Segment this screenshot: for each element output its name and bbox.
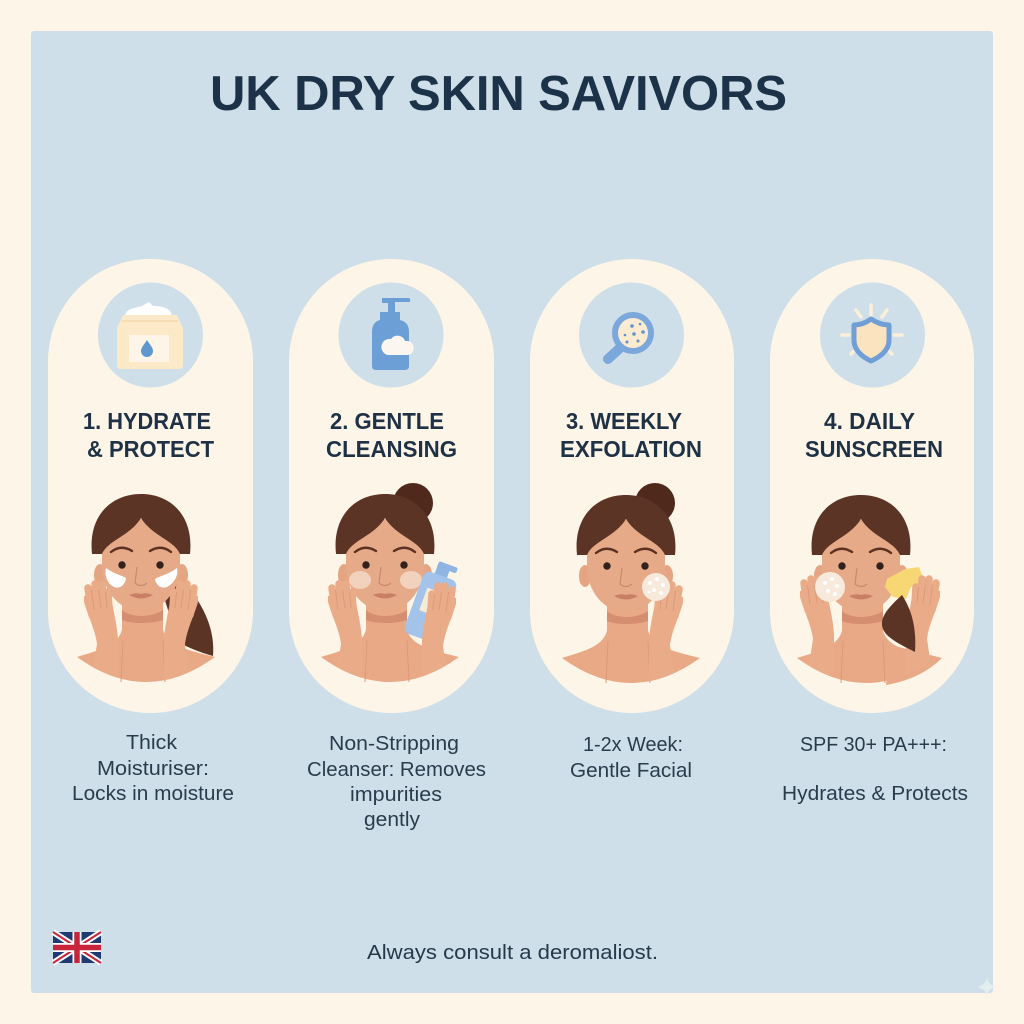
description: cleansing: impurities — [350, 783, 442, 806]
icon: cleanser bottle — [338, 282, 444, 388]
description: sunscreen: Hydrates & Protects — [782, 782, 968, 805]
description: cleansing: Cleanser: Removes — [307, 758, 486, 781]
title: UK DRY SKIN SAVIVORS — [210, 67, 787, 121]
description: hydrate: Locks in moisture — [72, 782, 234, 805]
illustration: woman exfoliating — [562, 483, 700, 685]
icon: moisturiser jar — [98, 282, 203, 388]
heading: EXFOLATION — [560, 436, 702, 462]
illustration: woman applying cream — [77, 494, 215, 684]
description: cleansing — [307, 732, 486, 831]
description: exfoliation: Gentle Facial — [570, 759, 692, 782]
heading: 4. DAILY — [824, 408, 915, 434]
heading: CLEANSING — [326, 436, 457, 462]
heading — [805, 408, 943, 462]
description: hydrate — [72, 731, 234, 805]
icon: UK flag — [53, 932, 101, 963]
heading: SUNSCREEN — [805, 436, 943, 462]
panel: hydrate and protect — [48, 259, 253, 713]
description: exfoliation — [570, 733, 692, 782]
icon: shield and sun — [820, 282, 925, 388]
heading — [83, 408, 214, 462]
panel: gentle cleansing — [289, 259, 494, 713]
description: exfoliation: 1-2x Week: — [583, 733, 683, 756]
heading: 3. WEEKLY — [566, 408, 682, 434]
illustration: woman using cleanser — [321, 483, 463, 686]
heading — [326, 408, 457, 462]
description: cleansing: gently — [364, 808, 421, 831]
illustration: woman applying sunscreen — [797, 495, 942, 685]
description: sunscreen — [782, 733, 968, 805]
description: hydrate: Moisturiser: — [97, 757, 209, 780]
heading: & PROTECT — [87, 436, 214, 462]
icon: corner sparkle — [977, 977, 996, 996]
heading: 2. GENTLE — [330, 408, 444, 434]
panel: daily sunscreen — [770, 259, 974, 713]
description: cleansing: Non-Stripping — [329, 732, 459, 755]
heading: 1. HYDRATE — [83, 408, 211, 434]
icon: magnifier — [579, 282, 684, 388]
description: sunscreen: SPF 30+ PA+++: — [800, 733, 947, 756]
description: hydrate: Thick — [126, 731, 178, 754]
footer note: Always consult a deromaliost. — [367, 942, 658, 964]
heading — [560, 408, 702, 462]
panel: weekly exfoliation — [530, 259, 734, 713]
